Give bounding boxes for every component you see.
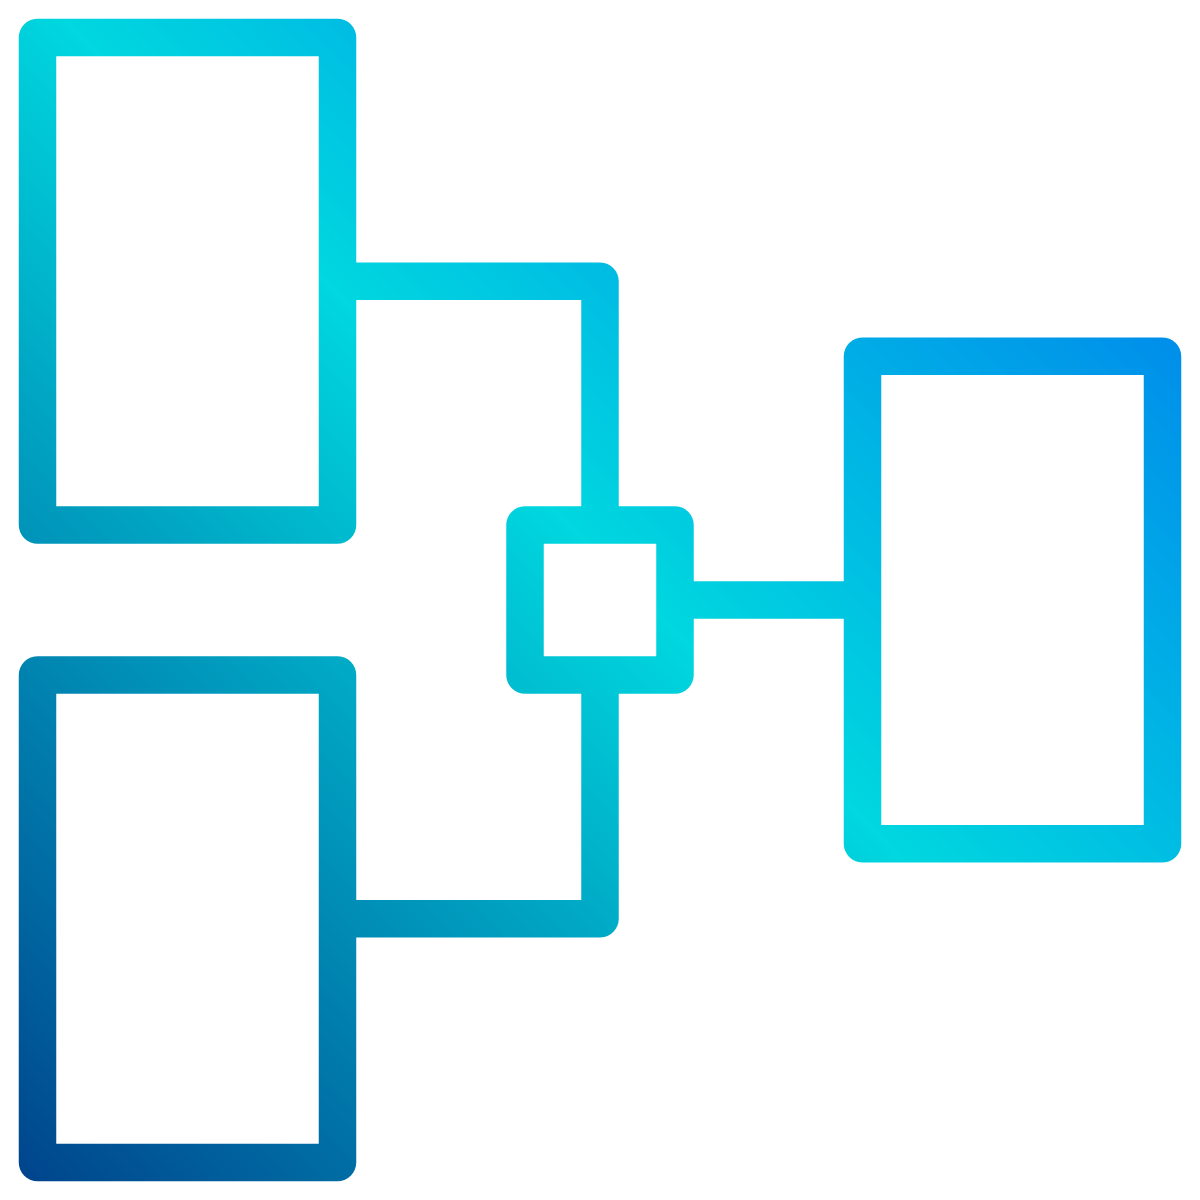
panel: bottom-left block [19, 656, 356, 1181]
panel: right block [844, 338, 1181, 862]
connector: bottom-left block to centre node [342, 680, 619, 938]
panel: centre node [506, 506, 694, 694]
panel: top-left block [19, 19, 356, 544]
connector: top-left block to centre node [342, 262, 619, 520]
connector: centre node to right block [680, 581, 858, 619]
